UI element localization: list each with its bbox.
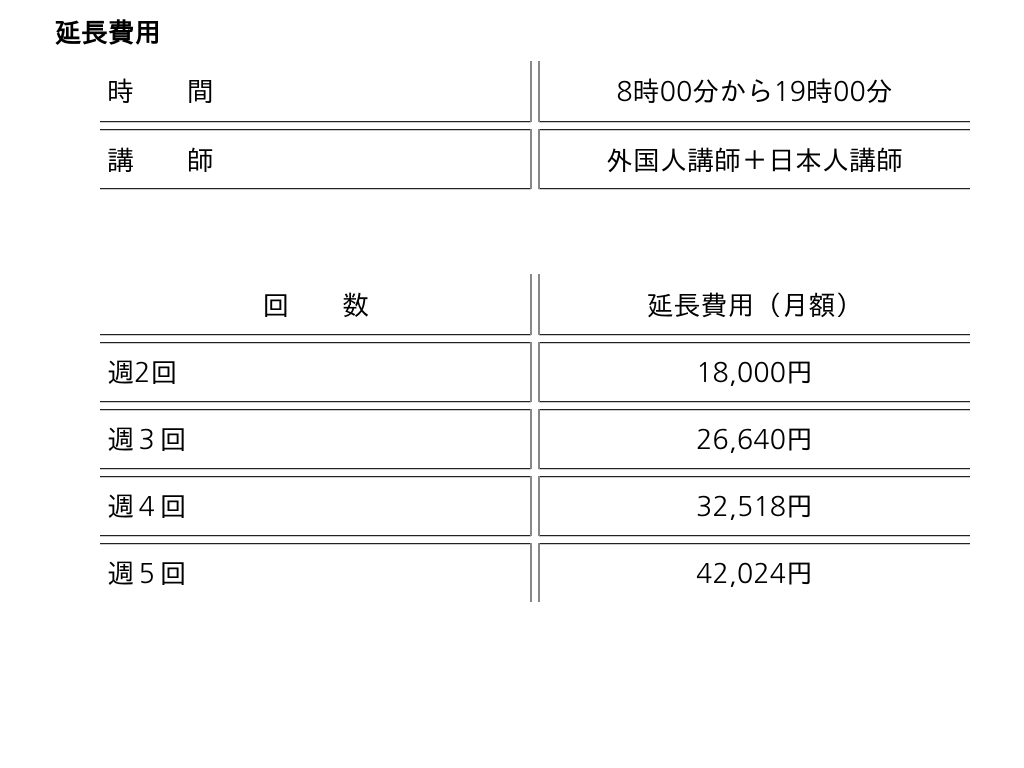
row value: teachers: 外国人講師＋日本人講師 (606, 147, 903, 174)
row value: four times a week: 32,518円 (696, 493, 813, 520)
row label: teachers: 講 師 (107, 147, 213, 174)
column header: count: 回 数 (262, 292, 369, 319)
row label: four times a week: 週 4 回 (107, 493, 186, 520)
row value: five times a week: 42,024円 (696, 560, 813, 587)
row value: twice a week: 18,000円 (696, 359, 813, 386)
row label: twice a week: 週2回 (107, 359, 177, 386)
row label: time: 時 間 (107, 78, 213, 105)
title: 延長費用 (54, 20, 161, 46)
column header: fee: 延長費用（月額） (646, 292, 862, 319)
table: hours and teachers (100, 61, 970, 190)
row value: time: 8時00分から19時00分 (616, 78, 893, 105)
table: extension fees (100, 274, 970, 602)
row label: five times a week: 週 5 回 (107, 560, 186, 587)
row label: three times a week: 週 3 回 (107, 426, 186, 453)
row value: three times a week: 26,640円 (696, 426, 813, 453)
